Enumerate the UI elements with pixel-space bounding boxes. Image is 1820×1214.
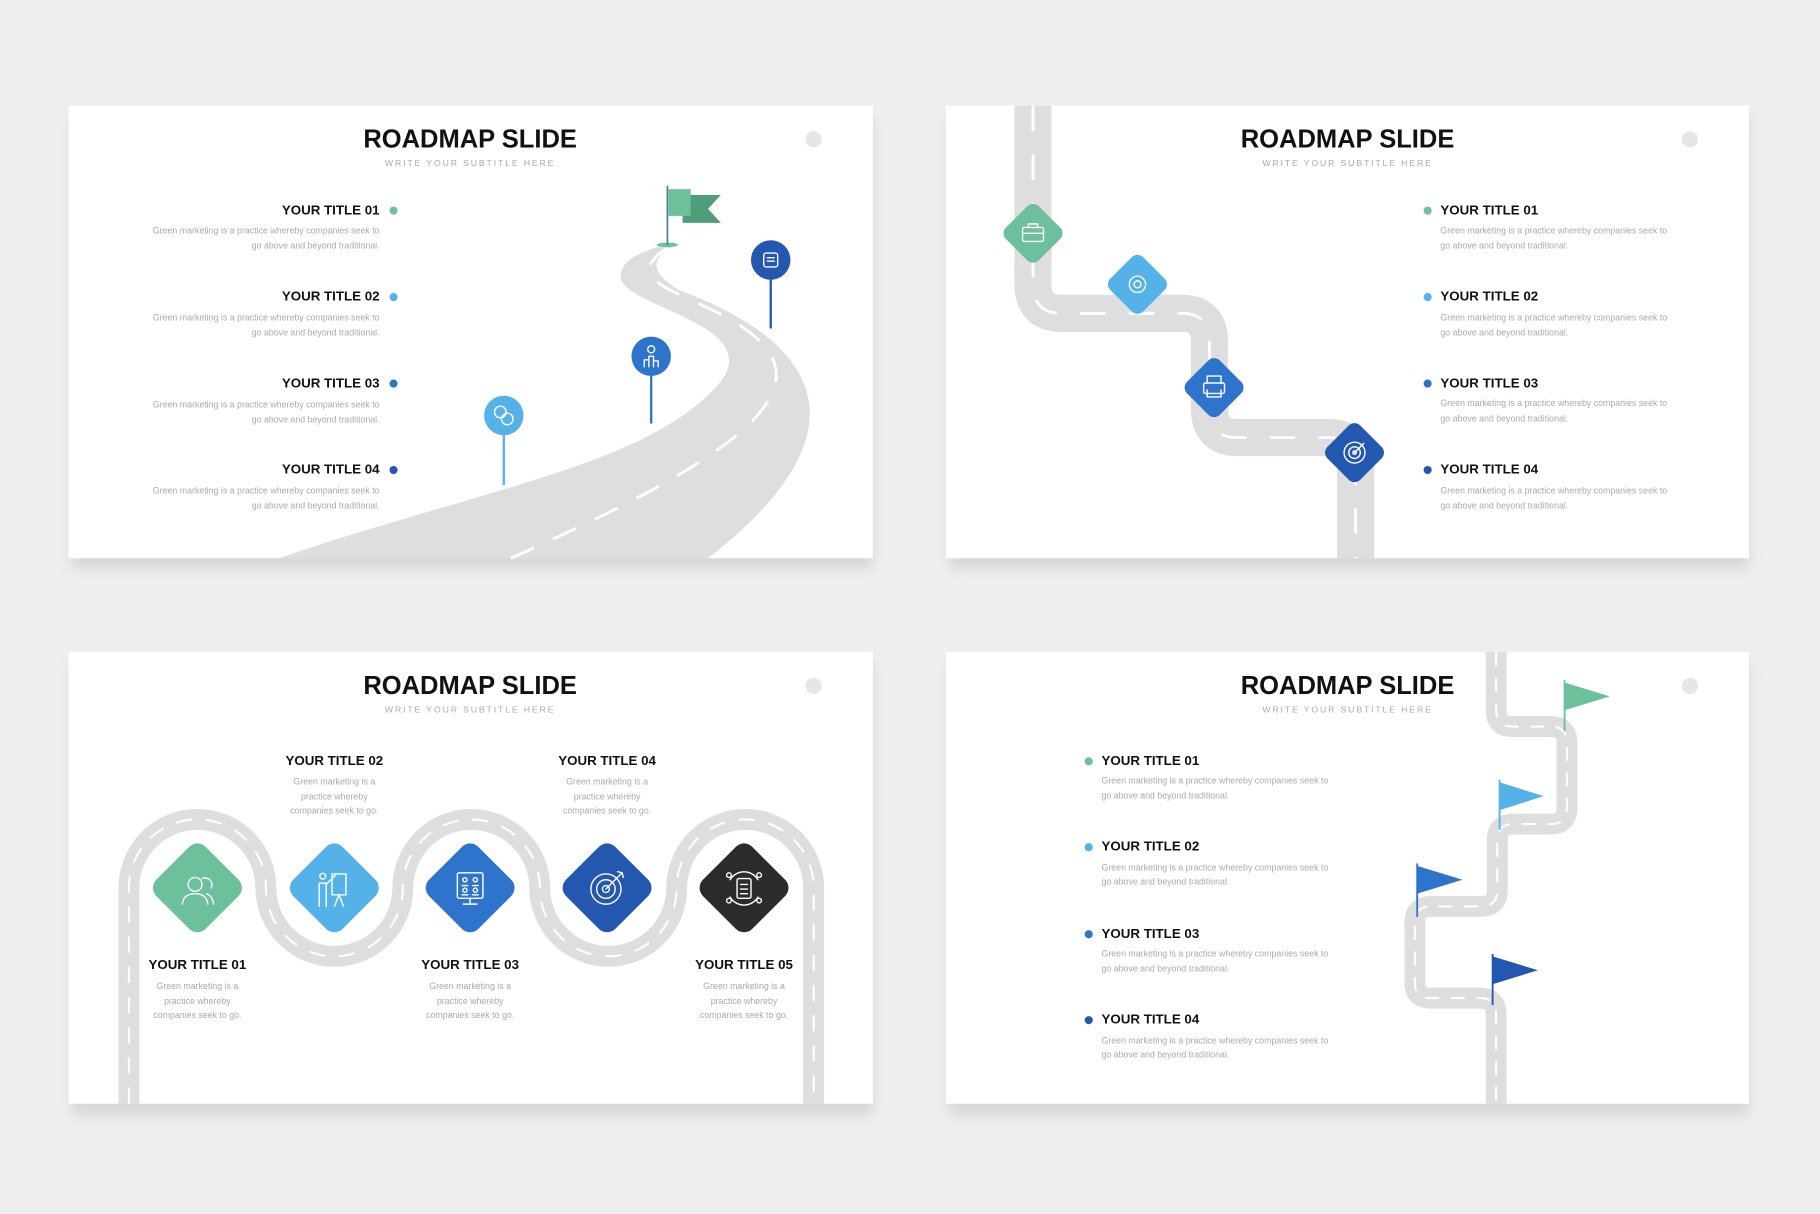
subtitle: WRITE YOUR SUBTITLE HERE xyxy=(385,158,555,168)
list items: Green marketing is a practice whereby companies seek to xyxy=(1102,775,1328,785)
page number xyxy=(806,131,822,147)
step labels: companies seek to go. xyxy=(700,1010,788,1020)
list items: Green marketing is a practice whereby companies seek to xyxy=(153,312,380,322)
list items: go above and beyond traditional. xyxy=(1440,240,1568,250)
title: ROADMAP SLIDE xyxy=(363,125,577,153)
list items xyxy=(153,203,398,510)
list items: Green marketing is a practice whereby companies seek to xyxy=(1102,948,1328,958)
step labels xyxy=(149,753,793,1020)
flag xyxy=(657,186,721,247)
pins xyxy=(484,240,790,485)
list items: Green marketing is a practice whereby companies seek to xyxy=(153,399,380,409)
step labels: companies seek to go. xyxy=(153,1010,241,1020)
step labels: Green marketing is a xyxy=(156,981,238,991)
step labels: practice whereby xyxy=(164,996,231,1006)
panel: slide 4 xyxy=(946,652,1749,1115)
list items: YOUR TITLE 03 xyxy=(1102,926,1199,941)
panel: slide 2 xyxy=(946,106,1749,569)
panel: slide 3 xyxy=(69,652,873,1115)
panel: slide 1 xyxy=(69,106,873,569)
list items: Green marketing is a practice whereby companies seek to xyxy=(153,225,380,235)
list items: Green marketing is a practice whereby companies seek to xyxy=(1440,485,1667,495)
subtitle: WRITE YOUR SUBTITLE HERE xyxy=(1262,158,1433,168)
list items: YOUR TITLE 01 xyxy=(1440,203,1539,218)
list items: Green marketing is a practice whereby companies seek to xyxy=(1440,312,1667,322)
list items xyxy=(1424,203,1667,510)
step labels: practice whereby xyxy=(711,996,778,1006)
list items: Green marketing is a practice whereby companies seek to xyxy=(153,485,380,495)
step labels: practice whereby xyxy=(301,792,368,802)
flags xyxy=(1417,680,1610,1005)
step labels: Green marketing is a xyxy=(703,981,785,991)
list items: YOUR TITLE 04 xyxy=(282,462,380,477)
step labels: Green marketing is a xyxy=(293,777,375,787)
list items: Green marketing is a practice whereby companies seek to xyxy=(1440,225,1667,235)
diamond markers xyxy=(1000,200,1387,485)
list items: YOUR TITLE 04 xyxy=(1102,1012,1200,1027)
step labels: practice whereby xyxy=(574,792,641,802)
road xyxy=(279,245,810,558)
step labels: companies seek to go. xyxy=(563,806,651,816)
step labels: companies seek to go. xyxy=(426,1010,514,1020)
list items: YOUR TITLE 02 xyxy=(1440,289,1538,304)
list items: go above and beyond traditional. xyxy=(252,500,380,510)
page number xyxy=(1682,678,1698,694)
page number xyxy=(1682,131,1698,147)
list items: YOUR TITLE 01 xyxy=(282,203,380,218)
page number xyxy=(806,678,822,694)
list items: go above and beyond traditional. xyxy=(1440,500,1568,510)
subtitle: WRITE YOUR SUBTITLE HERE xyxy=(1262,705,1433,715)
list items: go above and beyond traditional. xyxy=(1102,963,1229,973)
list items: Green marketing is a practice whereby companies seek to xyxy=(1102,862,1328,872)
step labels: YOUR TITLE 03 xyxy=(421,957,519,972)
step labels: Green marketing is a xyxy=(566,777,648,787)
road xyxy=(129,819,814,1104)
title: ROADMAP SLIDE xyxy=(1241,125,1454,153)
step labels: YOUR TITLE 02 xyxy=(285,753,383,768)
step labels: practice whereby xyxy=(437,996,504,1006)
list items: YOUR TITLE 01 xyxy=(1102,753,1200,768)
list items: go above and beyond traditional. xyxy=(1102,1049,1229,1059)
step labels: YOUR TITLE 05 xyxy=(695,957,793,972)
diamond icons xyxy=(148,839,793,937)
list items: go above and beyond traditional. xyxy=(252,327,380,337)
road xyxy=(1033,106,1356,558)
step labels: companies seek to go. xyxy=(290,806,378,816)
list items: Green marketing is a practice whereby companies seek to xyxy=(1102,1035,1328,1045)
list items: YOUR TITLE 03 xyxy=(282,376,380,391)
list items xyxy=(1085,753,1328,1059)
list items: go above and beyond traditional. xyxy=(252,414,380,424)
road xyxy=(1415,652,1567,1104)
title: ROADMAP SLIDE xyxy=(1241,672,1454,700)
list items: go above and beyond traditional. xyxy=(1102,876,1229,886)
title: ROADMAP SLIDE xyxy=(363,672,577,700)
step labels: Green marketing is a xyxy=(429,981,511,991)
step labels: YOUR TITLE 04 xyxy=(558,753,657,768)
list items: YOUR TITLE 02 xyxy=(282,289,380,304)
list items: go above and beyond traditional. xyxy=(1102,791,1229,801)
list items: go above and beyond traditional. xyxy=(252,240,380,250)
list items: go above and beyond traditional. xyxy=(1440,327,1568,337)
list items: go above and beyond traditional. xyxy=(1440,413,1568,423)
list items: YOUR TITLE 04 xyxy=(1440,462,1539,477)
list items: YOUR TITLE 03 xyxy=(1440,376,1538,391)
step labels: YOUR TITLE 01 xyxy=(149,957,247,972)
list items: YOUR TITLE 02 xyxy=(1102,839,1199,854)
list items: Green marketing is a practice whereby companies seek to xyxy=(1440,398,1667,408)
subtitle: WRITE YOUR SUBTITLE HERE xyxy=(385,705,555,715)
